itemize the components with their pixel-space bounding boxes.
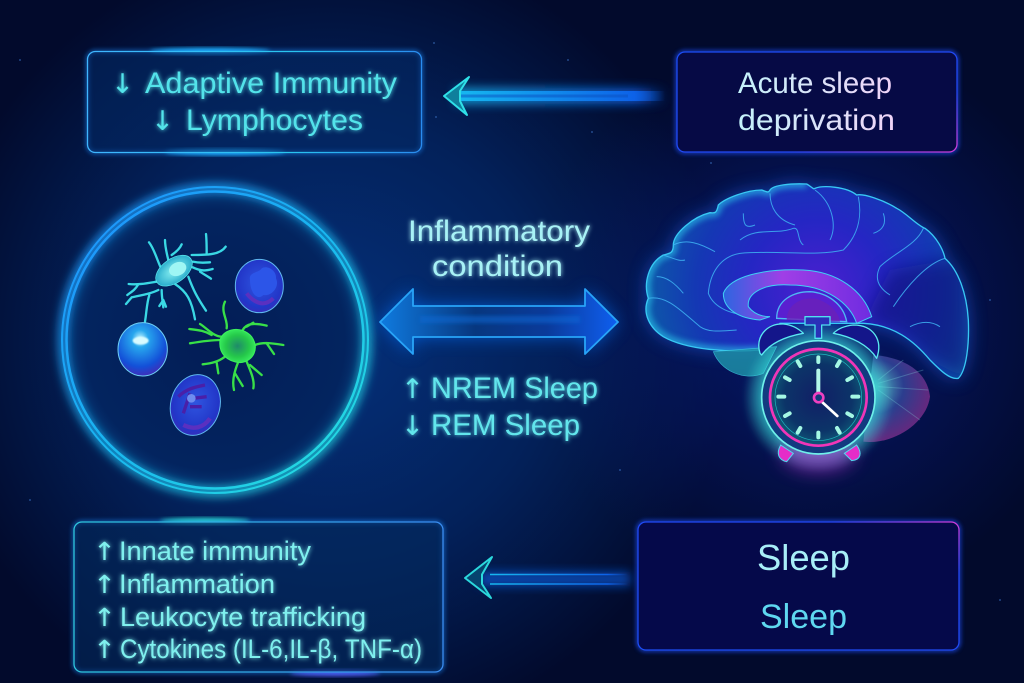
panel: acute sleep deprivation [677,52,957,152]
text: sleep repeated [757,537,850,636]
text: adaptive immunity line: Adaptive Immunity [145,67,397,100]
list: innate effects: Cytokines (IL-6,IL-β, TNF-α) [120,634,422,664]
alarm clock [743,317,893,472]
text: acute sleep deprivation [738,67,895,137]
arrow: sleep to innate immunity [465,557,630,598]
text: sleep repeated: Sleep [757,537,850,578]
text: sleep stage changes: REM Sleep [431,409,580,442]
text: sleep stage changes: ↓ [401,411,424,442]
text: adaptive immunity line [111,67,397,137]
icon: green dendritic cell [189,302,283,390]
text: adaptive immunity line: Lymphocytes [186,104,363,137]
icon: bright blue lymphocyte [118,323,167,376]
corpus callosum [723,270,872,323]
text: adaptive immunity line: ↓ [111,69,134,100]
list: innate effects: Innate immunity [119,536,311,566]
panel: innate immunity [74,518,443,676]
list: innate effects [93,536,422,664]
list: innate effects: ↑ [93,603,116,632]
text: acute sleep deprivation: deprivation [738,104,895,137]
text: adaptive immunity line: ↓ [151,106,174,137]
brain silhouette [646,184,969,380]
icon: dark lymphocyte top [235,259,283,313]
list: innate effects: ↑ [93,635,116,664]
text: acute sleep deprivation: Acute sleep [738,67,892,100]
list: innate effects: Inflammation [119,569,275,599]
text: sleep repeated: Sleep [760,598,847,636]
panel: adaptive immunity [88,48,422,155]
icon: brain with alarm clock [646,184,969,472]
panel: immune cells circle [62,187,368,493]
list: innate effects: Leukocyte trafficking [120,602,366,632]
icon: cyan dendritic cell [126,234,226,322]
arrow: double-headed [380,289,618,354]
cerebellum [863,355,930,442]
list: innate effects: ↑ [93,570,116,599]
arrow: deprivation to adaptive immunity [444,77,667,115]
brainstem region [713,347,777,376]
heading: inflammatory condition: Inflammatory [408,215,590,248]
icon: dark lymphocyte bottom [164,369,227,441]
list: innate effects: ↑ [93,537,116,566]
panel: sleep [638,522,959,650]
text: sleep stage changes: ↑ [401,374,424,405]
heading: inflammatory condition: condition [432,250,563,283]
text: sleep stage changes [401,372,598,442]
text: sleep stage changes: NREM Sleep [431,372,598,405]
heading: inflammatory condition [408,215,590,283]
